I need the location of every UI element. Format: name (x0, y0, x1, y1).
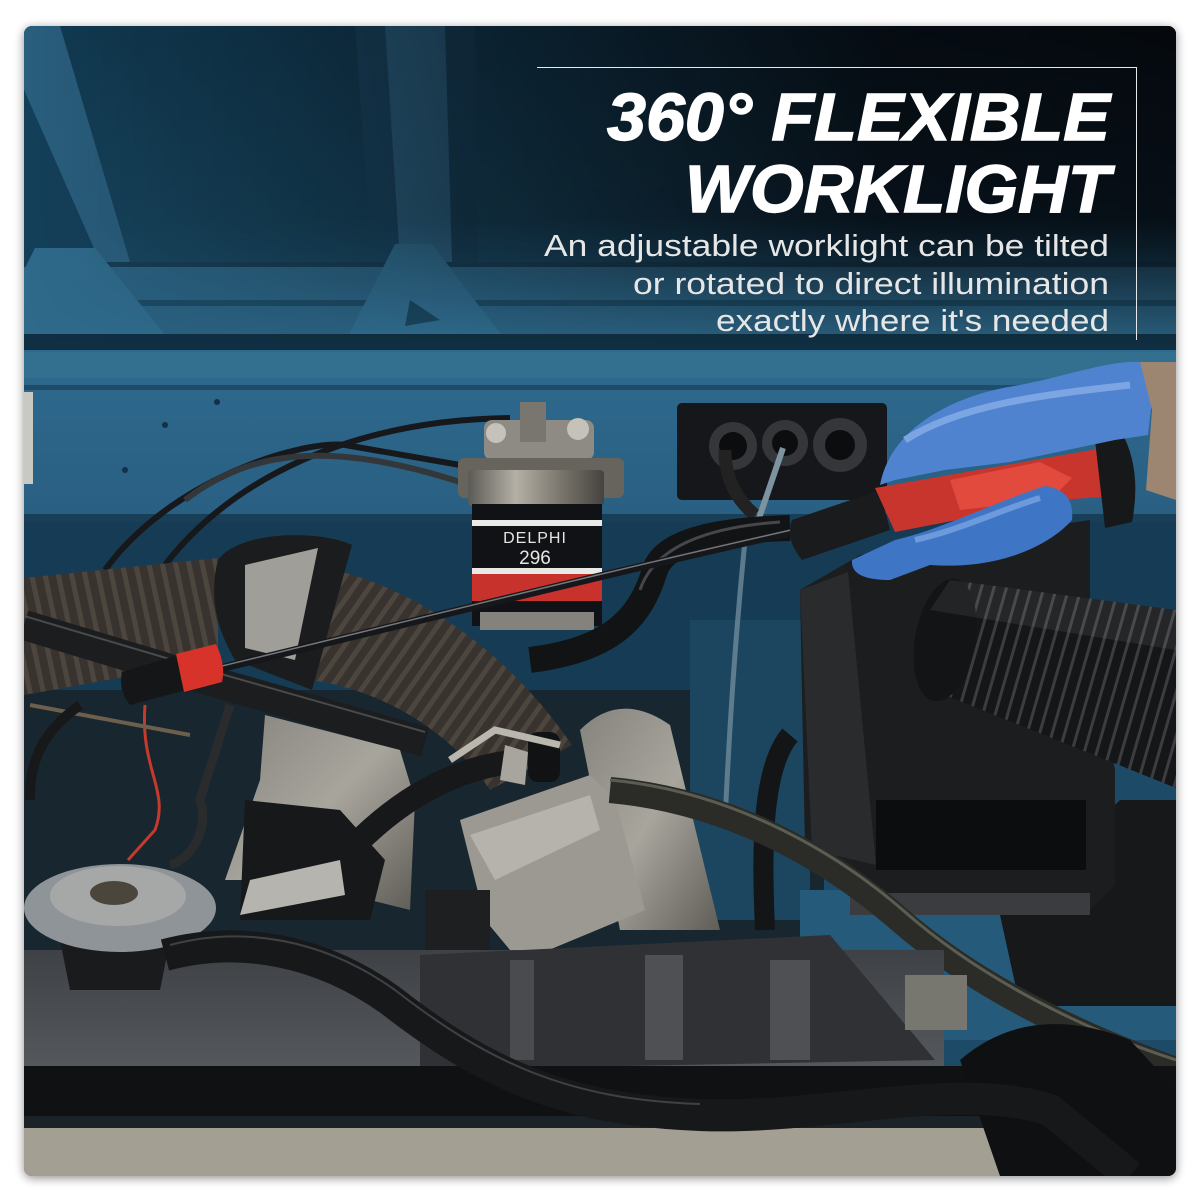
gloved hand (852, 362, 1176, 580)
description text: exactly where it's needed (716, 303, 1109, 338)
bottom: valve cover (24, 935, 1176, 1176)
worklight with flexible neck (121, 433, 1135, 705)
radiator cap (24, 864, 216, 990)
fuel filter: DELPHI (503, 530, 567, 547)
black curved pipe (530, 528, 790, 660)
big ribbed air hose (24, 535, 572, 790)
long braided hose (610, 790, 1176, 1070)
description text (544, 228, 1109, 338)
dark gradient overlay (24, 26, 1176, 346)
title: 360° FLEXIBLE (607, 80, 1112, 155)
title: WORKLIGHT (685, 152, 1115, 227)
wires left (30, 705, 230, 865)
corrugated duct (905, 574, 1176, 788)
fuel filter: 296 (519, 548, 551, 569)
description text: or rotated to direct illumination (633, 266, 1109, 301)
black box (800, 520, 1115, 915)
black clamp lower-left (240, 800, 385, 920)
fuel filter (458, 402, 624, 630)
engine castings (225, 709, 720, 962)
lower bay dark (24, 690, 824, 950)
firewall (24, 350, 1176, 690)
straight rubber hose (24, 625, 425, 742)
cables to filter (105, 418, 510, 570)
small black hose over casting (355, 762, 510, 845)
heading frame (537, 68, 1136, 340)
grommet panel (677, 403, 887, 530)
thick hose foreground (160, 930, 979, 1132)
hood underside (24, 26, 1176, 350)
title (607, 80, 1115, 227)
description text: An adjustable worklight can be tilted (544, 228, 1109, 263)
